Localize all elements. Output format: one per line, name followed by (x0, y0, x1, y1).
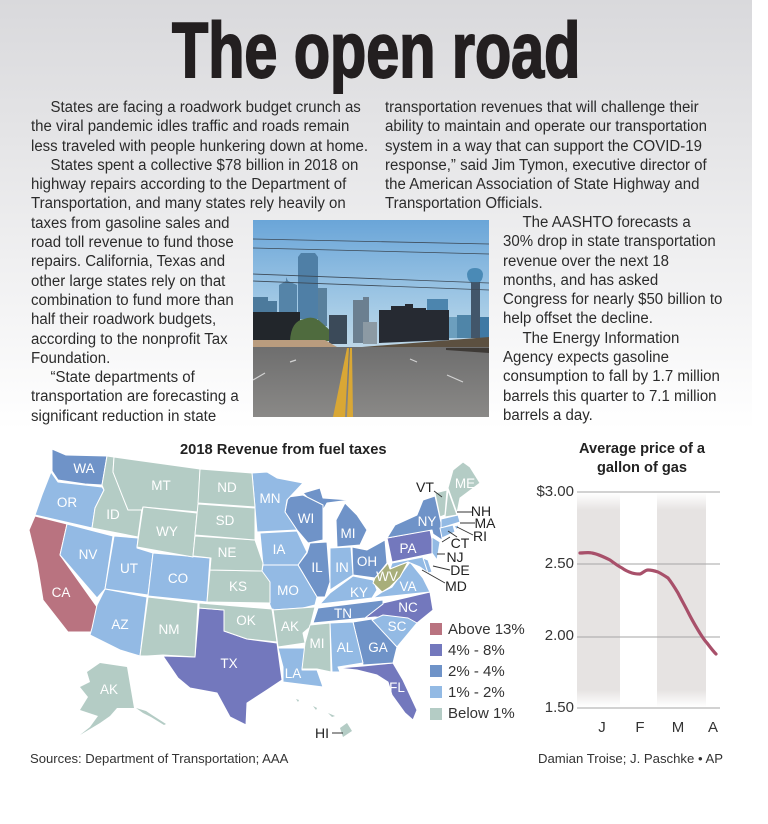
state labels: UT (120, 561, 138, 576)
leader labels: CT (451, 535, 470, 551)
map heading: 2018 Revenue from fuel taxes (180, 442, 387, 458)
state labels: KY (350, 585, 368, 600)
state labels: NY (418, 514, 436, 529)
state labels: AK (281, 619, 299, 634)
state labels: TX (220, 656, 238, 671)
state labels: NM (158, 622, 180, 637)
above 13 percent states (29, 516, 97, 632)
leader labels: RI (473, 528, 487, 544)
state labels: PA (399, 541, 417, 556)
state labels: WI (298, 511, 314, 526)
state labels: FL (389, 680, 405, 695)
line chart: average gas price: 1.50 (545, 699, 574, 716)
state labels: CO (168, 571, 188, 586)
state labels: NE (218, 545, 236, 560)
leader labels: NH (471, 503, 491, 519)
line chart: average gas price: J (598, 719, 606, 736)
leader labels: MA (474, 515, 496, 531)
state labels: NC (398, 600, 418, 615)
legend: Above 13% (448, 621, 525, 638)
below 1 percent states (80, 456, 480, 737)
source credit: Sources: Department of Transportation; AAA (30, 751, 288, 766)
state labels: MT (151, 478, 171, 493)
state labels: OK (236, 613, 256, 628)
leader lines (332, 491, 475, 733)
leader labels: DE (450, 562, 470, 578)
line chart: average gas price: 2.50 (545, 555, 574, 572)
legend: Below 1% (448, 705, 515, 722)
state labels: MI (310, 636, 324, 651)
chart heading: Average price of a (579, 441, 705, 457)
state labels: SD (216, 513, 235, 528)
state labels: ND (217, 480, 237, 495)
state labels: IL (311, 560, 323, 575)
state labels: KS (229, 579, 247, 594)
state labels: AZ (111, 617, 129, 632)
state labels: IN (335, 560, 349, 575)
state labels: VA (399, 579, 417, 594)
state labels: GA (368, 640, 388, 655)
chart heading (579, 441, 706, 476)
state labels: AL (337, 640, 354, 655)
chart heading: gallon of gas (597, 460, 687, 476)
state labels: MO (277, 583, 299, 598)
state labels: TN (334, 606, 352, 621)
line chart: average gas price: M (672, 719, 684, 736)
title: The open road (172, 6, 580, 94)
state labels: ID (106, 507, 120, 522)
2 to 4 percent states (52, 449, 442, 665)
state labels: CA (52, 585, 70, 600)
state labels: WV (376, 569, 398, 584)
article text: left column: States are facing a roadwork budget crunch as the viral pandemic idles traffic and roads remain less traveled with people hunkering down at home. States spent a collective $78 billion in 2018 on highway repairs according to the Department of Transportation, and many states rely heavily on taxes from gasoline sales and road toll revenue to fund those repairs. California, Texas and other large states rely on that combination to fund more than half their roadwork budgets, according to the nonprofit Tax Foundation. “State departments of transportation are forecasting a significant reduction in state (31, 99, 368, 425)
state labels: ME (455, 476, 475, 491)
state labels (52, 461, 475, 697)
state labels: WY (156, 524, 178, 539)
state labels: OR (57, 495, 77, 510)
state labels: MN (260, 491, 280, 506)
line chart: average gas price: $3.00 (536, 483, 574, 500)
line chart: average gas price: A (708, 719, 718, 736)
leader labels: VT (416, 479, 434, 495)
legend: 1% - 2% (448, 684, 505, 701)
state labels: LA (285, 666, 301, 681)
photo: empty highway and Dallas skyline (253, 220, 489, 417)
state labels: NV (79, 547, 97, 562)
state labels: MI (340, 526, 356, 541)
legend: 2% - 4% (448, 663, 505, 680)
West Virginia (373, 562, 408, 592)
article text: right column top: transportation revenues that will challenge their ability to maintain and operate our transportation system in a way that can support the COVID-19 response,” said Jim Tymon, executive director of the American Association of State Highway and Transportation Officials. (385, 99, 707, 212)
leader labels: HI (315, 725, 329, 741)
leader labels: NJ (446, 549, 464, 565)
byline credit: Damian Troise; J. Paschke • AP (538, 751, 723, 766)
leader labels: MD (445, 578, 467, 594)
legend: 4% - 8% (448, 642, 505, 659)
line chart: average gas price: F (635, 719, 645, 736)
4 to 8 percent states (163, 530, 435, 725)
article text: right column bottom: The AASHTO forecasts a 30% drop in state transportation revenue over the next 18 months, and has asked Congress for nearly $50 billion to help offset the decline. The Energy Information Agency expects gasoline consumption to fall by 1.7 million barrels this quarter to 7.1 million barrels a day. (503, 214, 722, 424)
state labels: AK (100, 682, 118, 697)
state labels: OH (357, 554, 377, 569)
legend (430, 621, 525, 722)
leader labels (315, 479, 496, 741)
state labels: IA (273, 542, 285, 557)
state labels: SC (388, 619, 407, 634)
line chart: average gas price: 2.00 (545, 627, 574, 644)
1 to 2 percent states (35, 472, 460, 687)
state labels: WA (73, 461, 95, 476)
